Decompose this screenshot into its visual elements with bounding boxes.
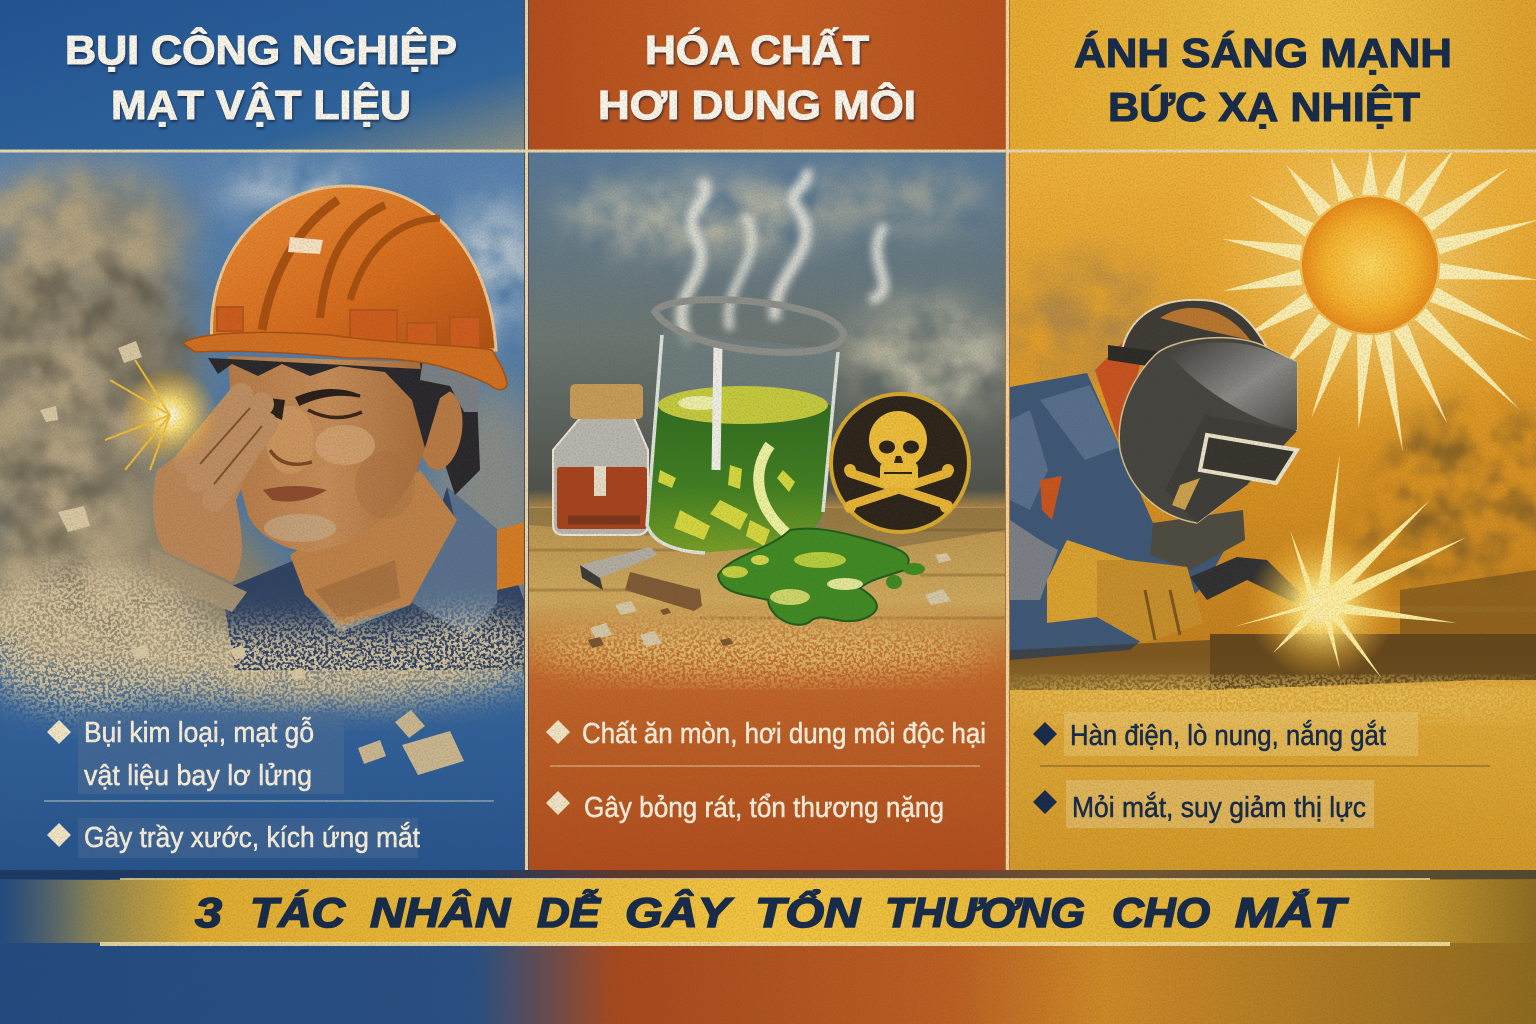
shirt	[222, 487, 524, 670]
bullets: light: Hàn điện, lò nung, nắng gắt	[1070, 719, 1386, 752]
table	[529, 507, 1005, 677]
illustration: welder under the sun	[990, 75, 1536, 870]
illustration: worker rubbing eye in dust	[0, 152, 550, 870]
header: light: ÁNH SÁNG MẠNH	[1074, 30, 1452, 76]
header: chemicals: HÓA CHẤT	[645, 27, 869, 73]
beaker	[647, 300, 843, 560]
smoke	[681, 170, 885, 345]
glove	[1047, 540, 1203, 643]
bullets: light	[1033, 712, 1490, 828]
torch	[1190, 557, 1307, 603]
bottom title banner: TÁC	[250, 889, 346, 936]
bottom title banner: CHO	[1112, 889, 1210, 936]
bottom title banner: MẮT	[1235, 888, 1349, 936]
header: chemicals	[529, 0, 1005, 150]
eye impact sparks	[105, 360, 218, 470]
rising dust over shirt	[0, 570, 540, 710]
header: light: BỨC XẠ NHIỆT	[1108, 84, 1420, 130]
bullets: dust: vật liệu bay lơ lửng	[84, 760, 312, 792]
illustration: beaker, bottle and poison sign	[529, 152, 1010, 870]
panel: chemicals	[529, 0, 1010, 870]
header: dust: MẠT VẬT LIỆU	[111, 82, 411, 128]
face	[228, 356, 428, 552]
bottle	[553, 384, 648, 535]
bottom title banner: TỔN	[755, 887, 862, 936]
debris	[40, 341, 304, 680]
bullets: dust: Bụi kim loại, mạt gỗ	[84, 716, 314, 749]
bottom title banner: THƯƠNG	[885, 889, 1085, 936]
bullets: light: Mỏi mắt, suy giảm thị lực	[1072, 791, 1366, 824]
facial highlights and dust	[263, 390, 415, 542]
ear and rear hair	[410, 360, 480, 495]
tools and rubble	[580, 547, 951, 648]
panel: industrial dust	[0, 0, 550, 870]
panel: strong light	[990, 0, 1536, 870]
sun	[1180, 75, 1536, 455]
header: dust: BỤI CÔNG NGHIỆP	[65, 27, 457, 73]
bottom title banner	[0, 870, 1536, 946]
hair under brim	[208, 358, 450, 448]
hand	[150, 395, 266, 612]
bullets: chemicals	[546, 718, 986, 824]
poison sign	[831, 394, 969, 532]
helmet	[183, 186, 507, 390]
bottom title banner: NHÂN	[370, 888, 512, 936]
spill	[718, 529, 925, 625]
bottom title banner: GÂY	[625, 888, 735, 936]
neck	[290, 470, 457, 625]
bullets: chemicals: Chất ăn mòn, hơi dung môi độc hại	[582, 718, 986, 750]
header: light	[1010, 0, 1536, 150]
bullets: chemicals: Gây bỏng rát, tổn thương nặng	[584, 792, 944, 824]
header: dust	[0, 0, 524, 150]
metal slab and lower shadow	[1010, 570, 1536, 690]
weld sparks	[1233, 453, 1467, 680]
header: chemicals: HƠI DUNG MÔI	[598, 82, 916, 128]
bottom title banner: 3	[195, 889, 222, 936]
bottom title banner: DỄ	[537, 888, 602, 936]
welding helmet	[1108, 300, 1297, 523]
welder body	[1010, 340, 1245, 660]
bullets: dust: Gây trầy xước, kích ứng mắt	[84, 821, 420, 854]
bullets: dust	[44, 710, 494, 858]
